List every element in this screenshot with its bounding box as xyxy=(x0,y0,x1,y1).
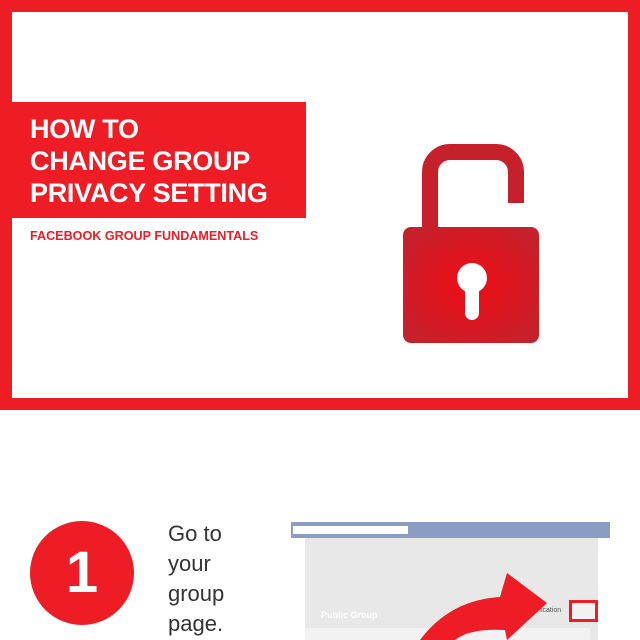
step 1 number circle xyxy=(30,521,134,625)
title band xyxy=(12,102,306,218)
step 1 text xyxy=(168,521,224,636)
title xyxy=(30,114,268,208)
step 1 number circle: 1 xyxy=(66,540,98,605)
title: HOW TO xyxy=(30,114,139,144)
screenshot: facebook group page: fication xyxy=(539,607,561,614)
title: PRIVACY SETTING xyxy=(30,178,268,208)
step 1 text: Go to xyxy=(168,521,222,546)
screenshot: facebook group page xyxy=(291,522,610,640)
step 1 text: your xyxy=(168,551,211,576)
icon: open padlock xyxy=(403,144,539,343)
title: CHANGE GROUP xyxy=(30,146,250,176)
header panel frame xyxy=(0,0,640,410)
step 1 text: group xyxy=(168,581,224,606)
screenshot: facebook group page: Public Group xyxy=(321,610,378,620)
subtitle: FACEBOOK GROUP FUNDAMENTALS xyxy=(30,229,258,243)
step 1 text: page. xyxy=(168,611,223,636)
